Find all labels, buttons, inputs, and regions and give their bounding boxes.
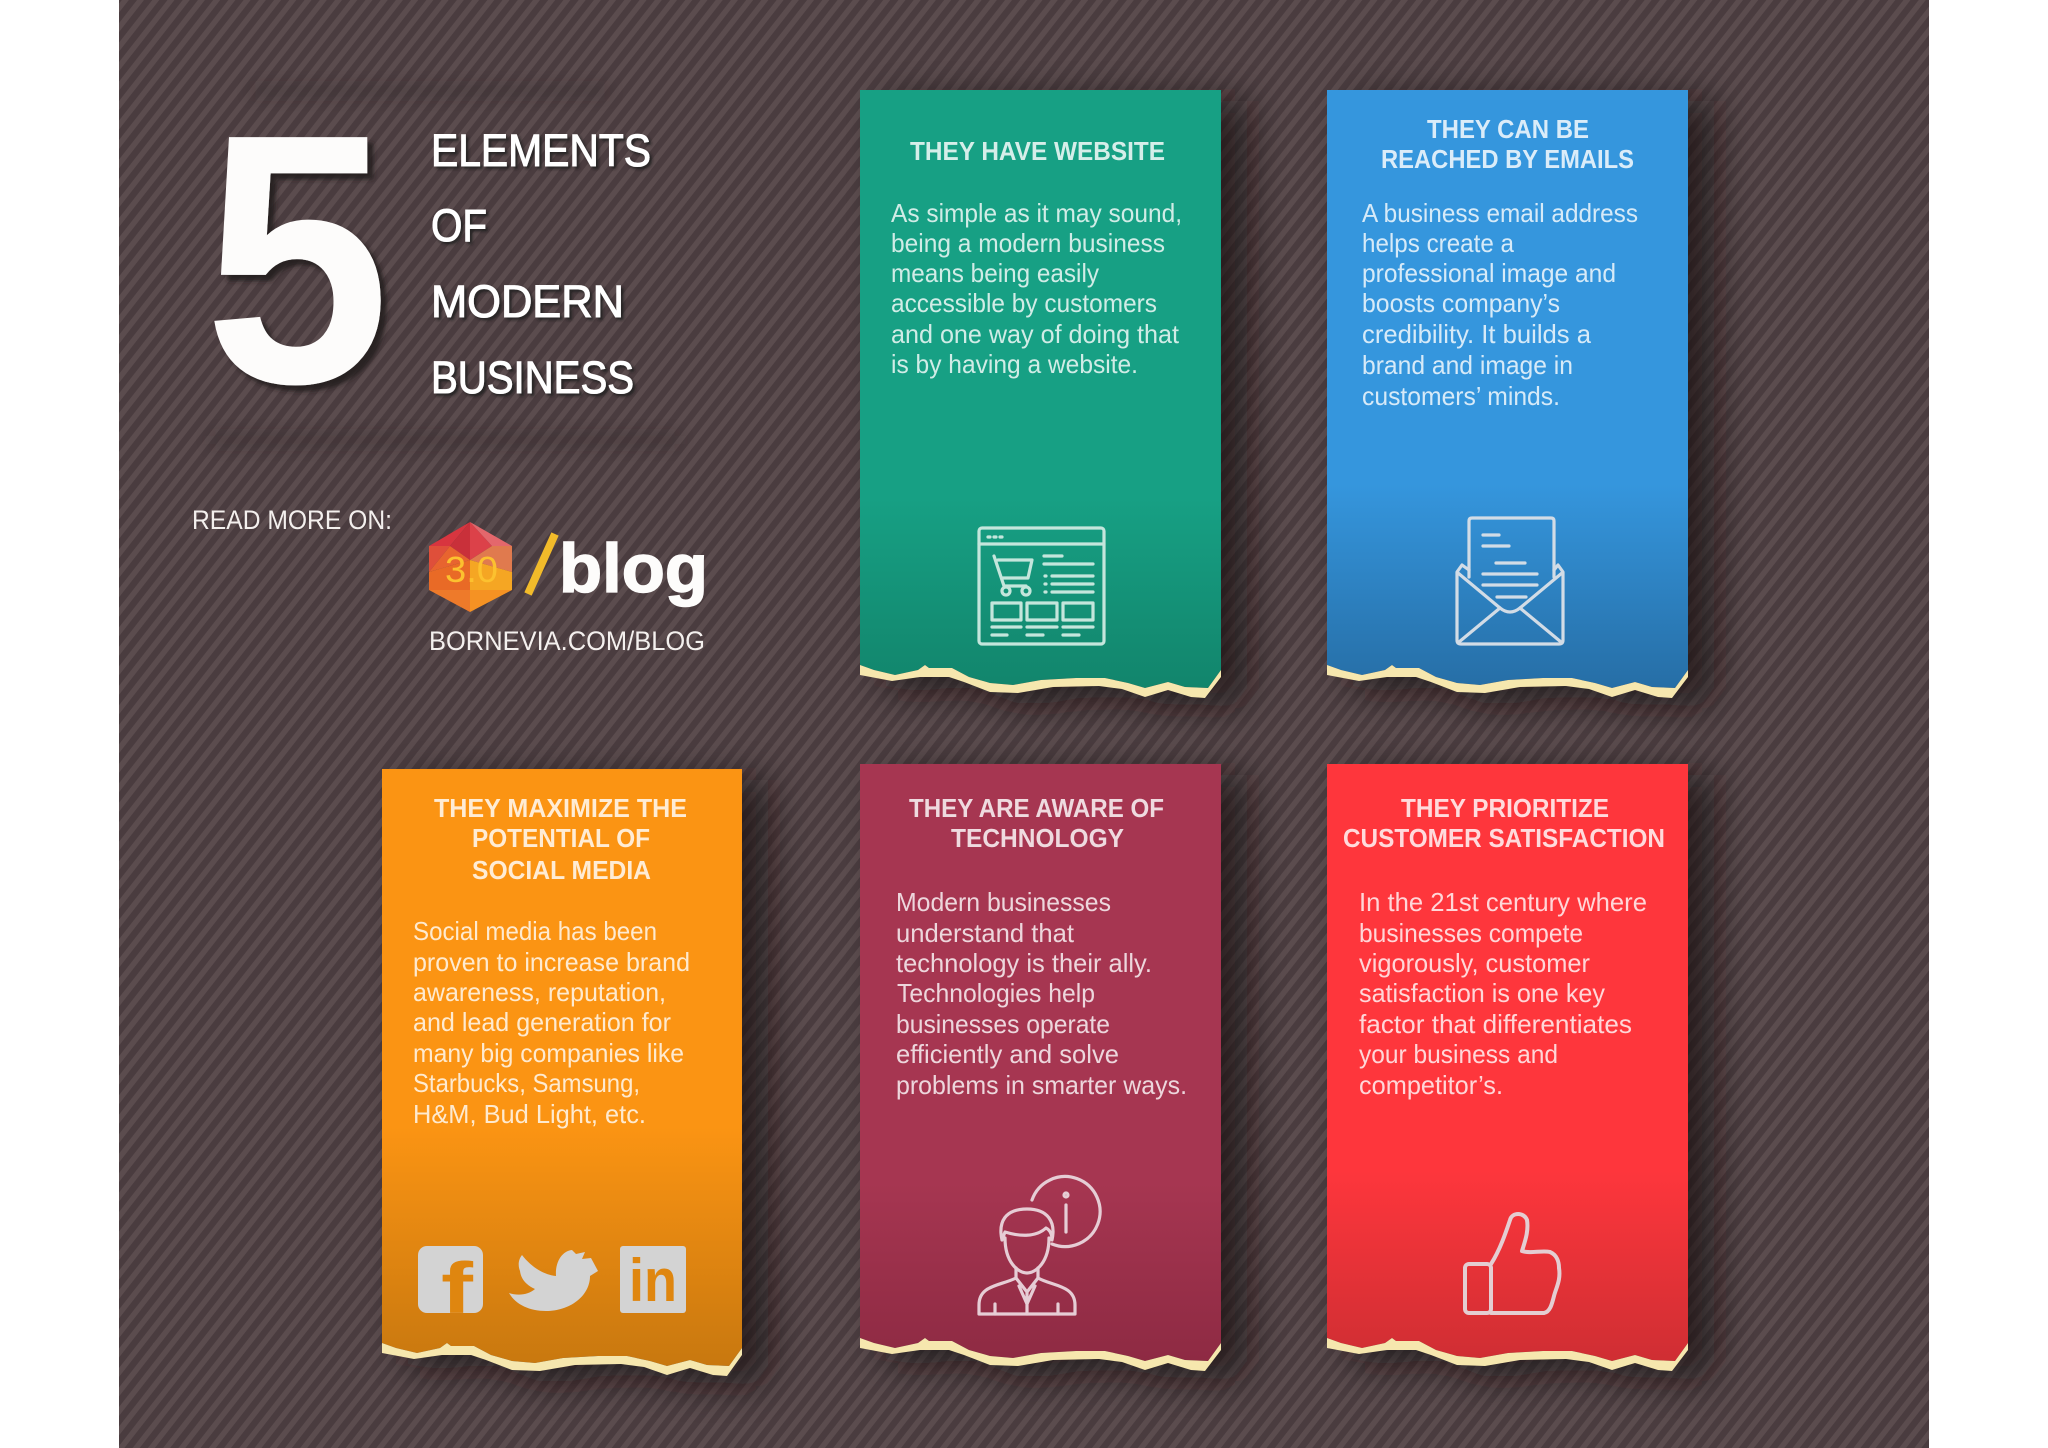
heading: SOCIAL MEDIA xyxy=(472,855,651,885)
heading: REACHED BY EMAILS xyxy=(1381,144,1634,174)
title lines: MODERN xyxy=(431,276,624,327)
body text: being a modern business xyxy=(891,228,1165,258)
body text: Technologies help xyxy=(897,978,1095,1008)
body text: competitor’s. xyxy=(1359,1070,1503,1100)
icon: person with info bubble xyxy=(979,1177,1100,1314)
body text: boosts company’s xyxy=(1362,288,1560,318)
torn edge xyxy=(1327,665,1688,698)
body text: means being easily xyxy=(891,258,1099,288)
panel: they have website xyxy=(860,90,1221,698)
body text: and one way of doing that xyxy=(891,319,1180,349)
big numeral 5: 5 xyxy=(204,61,390,458)
icon: low-poly hexagon xyxy=(429,522,512,612)
card body xyxy=(860,764,1221,1361)
3.0: 3.0 xyxy=(445,549,498,590)
body text: Starbucks, Samsung, xyxy=(413,1068,640,1098)
heading: TECHNOLOGY xyxy=(951,823,1124,853)
body text: understand that xyxy=(896,918,1075,948)
heading xyxy=(1343,793,1665,853)
read more label: READ MORE ON: xyxy=(192,505,392,535)
body text: proven to increase brand xyxy=(413,947,690,977)
body text: A business email address xyxy=(1362,198,1638,228)
icon: web shop page xyxy=(979,528,1104,644)
heading xyxy=(1381,114,1634,174)
body text: H&M, Bud Light, etc. xyxy=(413,1099,646,1129)
body text: your business and xyxy=(1359,1039,1558,1069)
body text: is by having a website. xyxy=(891,349,1138,379)
body text xyxy=(1362,198,1638,411)
heading: THEY PRIORITIZE xyxy=(1401,793,1609,823)
body text: awareness, reputation, xyxy=(413,977,666,1007)
icon: facebook xyxy=(418,1246,483,1329)
body text: Social media has been xyxy=(413,916,657,946)
body text: professional image and xyxy=(1362,258,1616,288)
body text: efficiently and solve xyxy=(896,1039,1119,1069)
panel: they prioritize customer satisfaction xyxy=(1327,764,1688,1371)
card body xyxy=(1327,764,1688,1361)
body text: many big companies like xyxy=(413,1038,684,1068)
torn edge xyxy=(860,1338,1221,1371)
heading xyxy=(909,793,1164,853)
body text: vigorously, customer xyxy=(1359,948,1590,978)
body text xyxy=(413,916,690,1129)
body text: businesses operate xyxy=(896,1009,1110,1039)
body text xyxy=(891,198,1182,379)
body text: and lead generation for xyxy=(413,1007,671,1037)
icon: thumbs up xyxy=(1465,1214,1559,1313)
heading: THEY ARE AWARE OF xyxy=(909,793,1164,823)
body text: customers’ minds. xyxy=(1362,381,1560,411)
heading xyxy=(434,793,687,885)
body text: satisfaction is one key xyxy=(1359,978,1605,1008)
heading: CUSTOMER SATISFACTION xyxy=(1343,823,1665,853)
title lines: OF xyxy=(431,200,487,251)
body text: problems in smarter ways. xyxy=(896,1070,1187,1100)
title: 5 elements of modern business xyxy=(204,61,651,458)
panel: they can be reached by emails xyxy=(1327,90,1688,698)
icon: twitter bird xyxy=(509,1250,598,1311)
blog wordmark: blog xyxy=(559,530,708,607)
title lines: ELEMENTS xyxy=(431,125,651,176)
heading: THEY MAXIMIZE THE xyxy=(434,793,687,823)
title lines: BUSINESS xyxy=(431,352,634,403)
body text: businesses compete xyxy=(1359,918,1583,948)
card body xyxy=(382,769,742,1366)
icon: facebook: f xyxy=(441,1249,474,1329)
panel: they maximize the potential of social media xyxy=(382,769,742,1376)
body text: accessible by customers xyxy=(891,288,1157,318)
icon: envelope with letter xyxy=(1457,518,1563,644)
body text: brand and image in xyxy=(1362,350,1573,380)
body text: factor that differentiates xyxy=(1359,1009,1632,1039)
logo: 3.0 blog xyxy=(429,522,708,656)
torn edge xyxy=(382,1343,742,1376)
icon: linkedin: in xyxy=(629,1247,677,1314)
card body xyxy=(860,90,1221,688)
heading: THEY CAN BE xyxy=(1427,114,1589,144)
body text xyxy=(1359,887,1647,1100)
body text: As simple as it may sound, xyxy=(891,198,1182,228)
title lines xyxy=(431,125,651,403)
body text xyxy=(896,887,1187,1100)
torn edge xyxy=(860,665,1221,698)
body text: credibility. It builds a xyxy=(1362,319,1592,349)
slash xyxy=(528,534,555,594)
heading: POTENTIAL OF xyxy=(472,823,650,853)
body text: technology is their ally. xyxy=(896,948,1152,978)
body text: In the 21st century where xyxy=(1359,887,1647,917)
card body xyxy=(1327,90,1688,688)
panel: they are aware of technology xyxy=(860,764,1221,1371)
body text: helps create a xyxy=(1362,228,1514,258)
heading: THEY HAVE WEBSITE xyxy=(910,136,1165,166)
torn edge xyxy=(1327,1338,1688,1371)
body text: Modern businesses xyxy=(896,887,1111,917)
blog url: BORNEVIA.COM/BLOG xyxy=(429,626,705,656)
